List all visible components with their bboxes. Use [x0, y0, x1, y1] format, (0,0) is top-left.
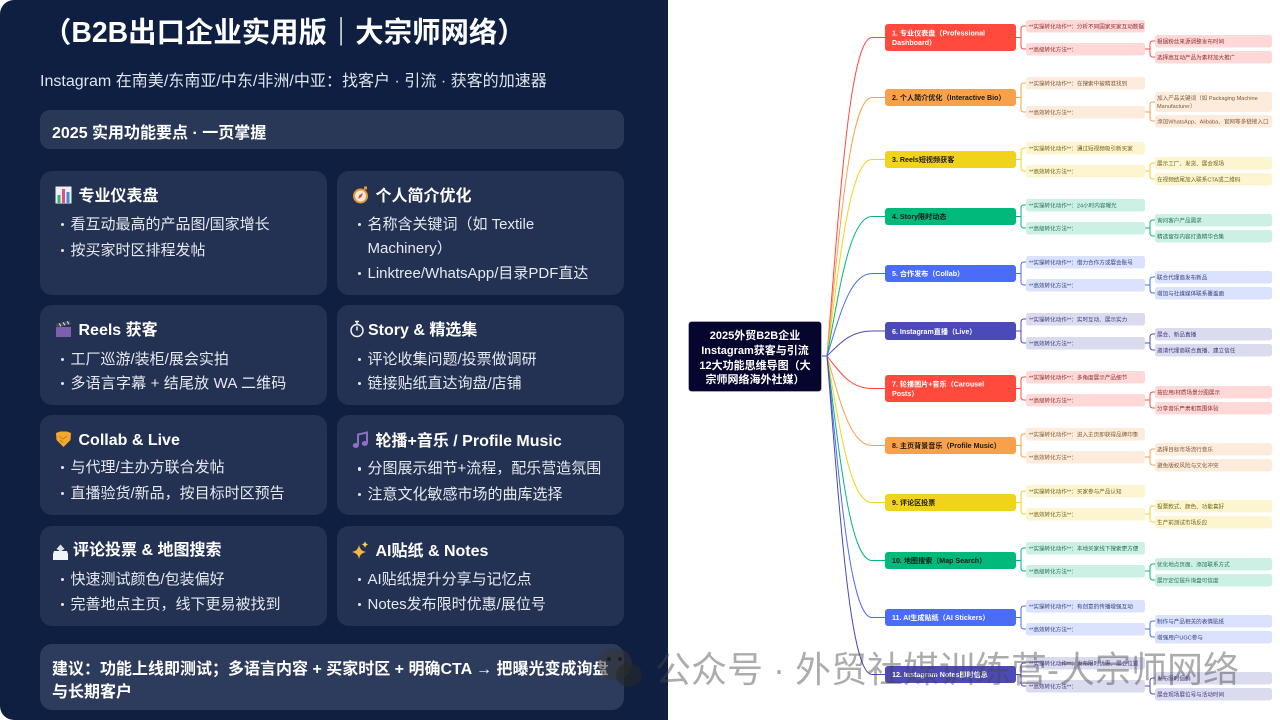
branch 8: 主页背景音乐: 选择目标市场流行音乐 [1157, 446, 1213, 454]
branch 5: 合作发布: 联合代理商发布新品 [1157, 274, 1208, 282]
branch 11: AI生成贴纸: 制作与产品相关的表情贴纸 [1157, 618, 1225, 626]
branch 2: 个人简介优化: 2. 个人简介优化（Interactive Bio） [892, 93, 1006, 102]
branch 3: Reels短视频获客: 在视频结尾加入联系CTA或二维码 [1157, 176, 1241, 184]
bullet: 快速测试颜色/包装偏好 [70, 570, 225, 588]
branch connectors from central node [822, 38, 885, 674]
branch 11: AI生成贴纸: **实操转化动作**：有创意的传播增强互动 [1029, 602, 1133, 610]
heading: 专业仪表盘 [78, 188, 159, 204]
bullet: 注意文化敏感市场的曲库选择 [368, 486, 563, 502]
branch 3: Reels短视频获客: 3. Reels短视频获客 [892, 155, 954, 164]
branch 9: 评论区投票: 投票款式、颜色、功能喜好 [1157, 502, 1225, 510]
branch 9: 评论区投票: **实操转化动作**：买家参与产品认知 [1029, 488, 1122, 496]
bullet: 分图展示细节+流程，配乐营造氛围 [368, 460, 601, 477]
branch 1: 专业仪表盘: **实操转化动作**：分析不同国家买家互动数据 [1029, 22, 1144, 30]
branch 4: Story限时动态: **实操转化动作**：24小时内容曝光 [1029, 202, 1117, 210]
branch 2: 个人简介优化: **实操转化动作**：在搜索中被精准找到 [1029, 80, 1128, 88]
branch 12: Instagram Notes: **高效转化方法**： [1029, 682, 1077, 690]
section heading bar [40, 110, 624, 149]
branch 1: 专业仪表盘: Dashboard） [892, 39, 936, 47]
heading: 个人简介优化 [376, 188, 472, 204]
watermark text: 公众号 · 外贸社媒训练营-大宗师网络 [655, 649, 1239, 690]
bullet: Notes发布限时优惠/展位号 [368, 596, 546, 612]
branch 8: 主页背景音乐: 避免版权风险与文化冲突 [1157, 462, 1219, 470]
panel: Reels 获客 [40, 305, 327, 405]
branch 6: Instagram直播: **高效转化方法**： [1029, 340, 1077, 348]
central node: 宗师网络海外社媒） [706, 372, 804, 386]
icon: clapperboard [56, 320, 71, 337]
branch 11: AI生成贴纸: 11. AI生成贴纸（AI Stickers） [892, 613, 990, 622]
branch 9: 评论区投票: **高效转化方法**： [1029, 510, 1077, 518]
branch 6: Instagram直播: 展会、新品直播 [1157, 330, 1197, 338]
branch 6: Instagram直播: 6. Instagram直播（Live） [892, 327, 976, 336]
bullet: 按买家时区排程发帖 [70, 242, 206, 258]
branch 3: Reels短视频获客: **实操转化动作**：通过短视频吸引新买家 [1029, 144, 1133, 152]
branch 4: Story限时动态: 询问客户产品需求 [1157, 216, 1202, 224]
icon: wechat bubbles [598, 648, 642, 687]
callout: advice: 建议：功能上线即测试；多语言内容 + 买家时区 + 明确CTA → 把曝光变成询盘 [52, 661, 608, 678]
branch 11: AI生成贴纸: 增强用户UGC参与 [1157, 634, 1203, 642]
branch 4: Story限时动态 [885, 199, 1272, 242]
branch 3: Reels短视频获客 [885, 142, 1272, 186]
subtitle: Instagram 在南美/东南亚/中东/非洲/中亚：找客户 · 引流 · 获客的加速器 [40, 72, 547, 90]
branch 7: 轮播图片+音乐 [885, 371, 1272, 414]
branch 12: Instagram Notes: 展会现场展位号与活动时间 [1157, 690, 1225, 698]
icon: handshake [56, 432, 71, 447]
bullet: 名称含关键词（如 Textile [368, 216, 534, 232]
branch 4: Story限时动态: 4. Story限时动态 [892, 212, 946, 221]
branch 2: 个人简介优化: 加入产品关键词（如 Packaging Machine [1157, 94, 1258, 102]
branch 1: 专业仪表盘 [885, 20, 1272, 64]
central node: 12大功能思维导图（大 [699, 358, 811, 372]
bullet: 链接贴纸直达询盘/店铺 [368, 374, 522, 392]
bullet: 直播验货/新品，按目标时区预告 [70, 484, 285, 502]
heading: AI贴纸 & Notes [376, 542, 488, 560]
panel: mind map [688, 20, 1272, 700]
branch 3: Reels短视频获客: **高效转化方法**： [1029, 168, 1077, 176]
branch 5: 合作发布: **实操转化动作**：借力合作方或展会账号 [1029, 258, 1133, 266]
branch 12: Instagram Notes: 12. Instagram Notes即时信息 [892, 670, 988, 679]
watermark [598, 648, 1239, 690]
branch 7: 轮播图片+音乐: **实操转化动作**：多角度展示产品细节 [1029, 374, 1128, 382]
branch 8: 主页背景音乐 [885, 428, 1272, 472]
branch 2: 个人简介优化: Manufacturer） [1157, 103, 1196, 110]
branch 8: 主页背景音乐: **实操转化动作**：进入主页即获得品牌印象 [1029, 430, 1139, 438]
bullet: 与代理/主办方联合发帖 [70, 458, 225, 476]
central node [688, 322, 822, 392]
branch 12: Instagram Notes: 发布限时促销 [1157, 674, 1191, 682]
heading: Reels 获客 [78, 322, 158, 338]
bullet: Linktree/WhatsApp/目录PDF直达 [368, 264, 588, 282]
branch 5: 合作发布 [885, 256, 1272, 300]
bullet: 看互动最高的产品图/国家增长 [70, 216, 270, 232]
bullet: 评论收集问题/投票做调研 [368, 350, 537, 368]
icon: compass [353, 186, 368, 204]
section heading bar: 2025 实用功能要点 · 一页掌握 [52, 125, 266, 142]
branch 4: Story限时动态: 精选留存内容打造精华合集 [1157, 232, 1225, 240]
branch 3: Reels短视频获客: 展示工厂、发货、展会现场 [1157, 160, 1225, 168]
branch 8: 主页背景音乐: 8. 主页背景音乐（Profile Music） [892, 441, 1001, 450]
panel: Story & 精选集 [337, 305, 624, 405]
branch 1: 专业仪表盘: 选择高互动产品为素材加大推广 [1157, 54, 1236, 62]
branch 5: 合作发布: **高效转化方法**： [1029, 282, 1077, 290]
panel: 评论投票 & 地图搜索 [40, 526, 327, 626]
icon: bar chart [56, 186, 72, 204]
branch 12: Instagram Notes [885, 657, 1272, 700]
branch 9: 评论区投票 [885, 485, 1272, 528]
branch 7: 轮播图片+音乐: 按应用/材质场景分图展示 [1157, 388, 1220, 396]
icon: music note [352, 431, 368, 448]
bullet: 完善地点主页，线下更易被找到 [70, 596, 281, 612]
callout: advice [40, 644, 624, 710]
heading: 评论投票 & 地图搜索 [73, 542, 221, 559]
branch 5: 合作发布: 5. 合作发布（Collab） [892, 269, 964, 278]
heading: 轮播+音乐 / Profile Music [376, 432, 562, 450]
bullet: 多语言字幕 + 结尾放 WA 二维码 [70, 374, 286, 392]
branch 10: 地图搜索: **高级转化方法**： [1029, 568, 1077, 576]
branch 9: 评论区投票: 9. 评论区投票 [892, 498, 935, 507]
callout: advice: 与长期客户 [52, 684, 132, 701]
branch 10: 地图搜索: 10. 地图搜索（Map Search） [892, 556, 986, 565]
branch 1: 专业仪表盘: 根据粉丝来源调整发布时间 [1157, 38, 1225, 46]
title: （B2B出口企业实用版｜大宗师网络） [43, 17, 526, 49]
bullet: AI贴纸提升分享与记忆点 [368, 570, 532, 588]
panel: 专业仪表盘 [40, 171, 327, 295]
icon: sparkles [352, 541, 368, 559]
branch 6: Instagram直播: 邀请代理商联合直播、建立信任 [1157, 346, 1236, 354]
branch 7: 轮播图片+音乐: Posts） [892, 390, 918, 398]
heading: Collab & Live [78, 432, 180, 448]
branch 2: 个人简介优化: 添加WhatsApp、Alibaba、官网等多链接入口 [1157, 118, 1269, 126]
branch 12: Instagram Notes: **实操转化动作**：发布限时优惠、展会位置 [1029, 660, 1139, 668]
branch 11: AI生成贴纸 [885, 600, 1272, 644]
branch 1: 专业仪表盘: 1. 专业仪表盘（Professional [892, 28, 985, 38]
central node: 2025外贸B2B企业 [710, 328, 800, 342]
branch 1: 专业仪表盘: **高级转化方法**： [1029, 46, 1077, 54]
branch 10: 地图搜索 [885, 542, 1272, 586]
branch 6: Instagram直播: **实操转化动作**：实时互动、展示实力 [1029, 316, 1128, 324]
central node: Instagram获客与引流 [701, 343, 809, 357]
branch 7: 轮播图片+音乐: **高级转化方法**： [1029, 396, 1077, 404]
bullet continuation: Machinery） [368, 240, 452, 256]
branch 5: 合作发布: 增加与社媒媒体联系覆盖面 [1157, 290, 1225, 298]
branch 10: 地图搜索: **实操转化动作**：本地买家线下搜索更方便 [1029, 544, 1139, 552]
branch 6: Instagram直播 [885, 313, 1272, 356]
branch 8: 主页背景音乐: **高效转化方法**： [1029, 454, 1077, 462]
branch 9: 评论区投票: 生产前测试市场反应 [1157, 518, 1208, 526]
panel: 个人简介优化 [337, 171, 624, 295]
panel: AI贴纸 & Notes [337, 526, 624, 626]
bullet: 工厂巡游/装柜/展会实拍 [70, 350, 229, 368]
panel: 轮播+音乐 [337, 415, 624, 515]
branch 11: AI生成贴纸: **高效转化方法**： [1029, 626, 1077, 634]
branch 7: 轮播图片+音乐: 7. 轮播图片+音乐（Carousel [892, 380, 984, 388]
heading: Story & 精选集 [368, 322, 477, 338]
icon: ballot box [53, 544, 68, 560]
branch 2: 个人简介优化: **高效转化方法**： [1029, 108, 1077, 116]
branch 2: 个人简介优化 [885, 77, 1272, 128]
branch 10: 地图搜索: 优化地点页面、添加联系方式 [1157, 560, 1230, 568]
branch 7: 轮播图片+音乐: 分享音乐严肃和氛围体验 [1157, 404, 1219, 412]
icon: stopwatch [350, 320, 364, 338]
panel: left summary [0, 0, 668, 720]
panel: Collab & Live [40, 415, 327, 515]
branch 4: Story限时动态: **高级转化方法**： [1029, 224, 1077, 232]
branch 10: 地图搜索: 展厅定位提升询盘可信度 [1157, 576, 1219, 584]
